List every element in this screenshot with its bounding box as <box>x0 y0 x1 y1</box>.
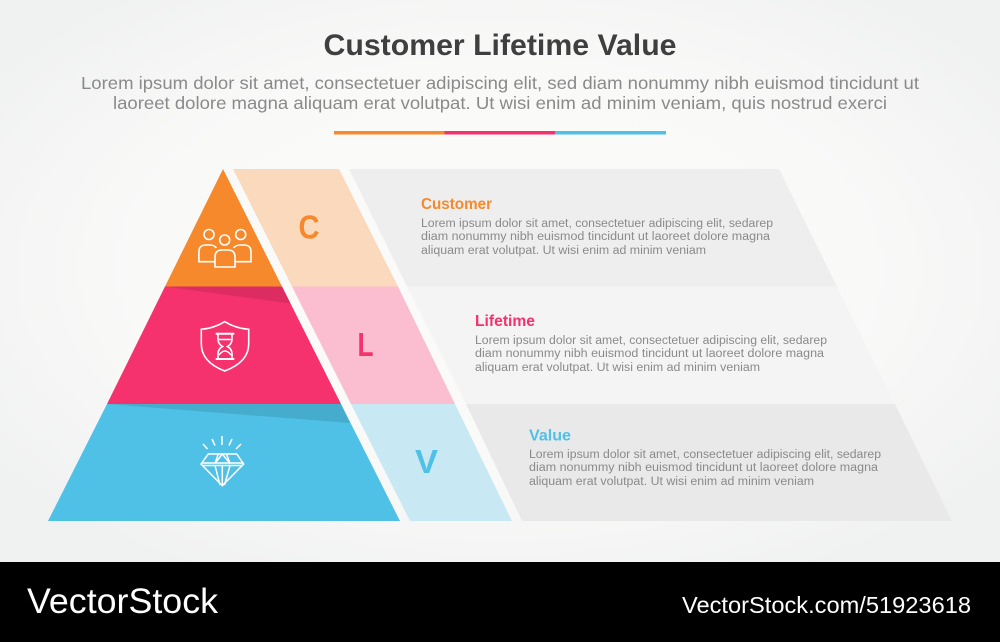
text block: value: aliquam erat volutpat. Ut wisi enim ad minim veniam <box>529 476 814 488</box>
panel: V letter band: V <box>415 443 438 480</box>
icon: group of people <box>199 230 251 267</box>
pyramid tier: customer <box>165 169 282 286</box>
title: Customer Lifetime Value <box>324 29 676 62</box>
text block: value: diam nonummy nibh euismod tincidunt ut laoreet dolore magna <box>529 462 879 474</box>
text block: customer: Lorem ipsum dolor sit amet, consectetuer adipiscing elit, sedarep <box>421 218 773 230</box>
text block: customer: diam nonummy nibh euismod tincidunt ut laoreet dolore magna <box>421 231 771 243</box>
text block: lifetime: Lorem ipsum dolor sit amet, consectetuer adipiscing elit, sedarep <box>475 335 827 347</box>
panel: lifetime text background <box>407 286 895 404</box>
panel: value text background <box>466 404 952 521</box>
icon: shield with hourglass <box>201 322 249 371</box>
subtitle: Lorem ipsum dolor sit amet, consectetuer adipiscing elit, sed diam nonummy nibh euismod tincidunt ut <box>81 73 919 93</box>
footer bar: VectorStock <box>27 582 219 621</box>
text block: value: Lorem ipsum dolor sit amet, consectetuer adipiscing elit, sedarep <box>529 449 881 461</box>
tier shadow <box>107 404 350 423</box>
subtitle: laoreet dolore magna aliquam erat volutpat. Ut wisi enim ad minim veniam, quis nostrud exerci <box>113 93 887 113</box>
tricolor divider <box>334 131 666 134</box>
panel: L letter band <box>292 286 455 404</box>
text block: customer: Customer <box>421 196 492 213</box>
panel: L letter band: L <box>358 326 374 363</box>
pyramid tier: value <box>48 404 400 521</box>
tier shadow <box>165 286 290 304</box>
text block: lifetime: diam nonummy nibh euismod tincidunt ut laoreet dolore magna <box>475 348 825 360</box>
footer bar: VectorStock.com/51923618 <box>682 592 971 618</box>
text block: customer <box>421 196 773 257</box>
icon: diamond <box>201 436 244 486</box>
subtitle <box>81 73 919 113</box>
panel: V letter band <box>351 404 512 521</box>
panel: C letter band: C <box>298 208 320 246</box>
footer bar <box>0 562 1000 642</box>
panel: customer text background <box>349 169 837 286</box>
pyramid tier: lifetime <box>107 286 341 404</box>
text block: lifetime: Lifetime <box>475 313 535 330</box>
text block: lifetime <box>475 313 827 374</box>
text block: lifetime: aliquam erat volutpat. Ut wisi enim ad minim veniam <box>475 362 760 374</box>
panel: C letter band <box>233 169 398 286</box>
text block: value <box>529 428 881 488</box>
text block: customer: aliquam erat volutpat. Ut wisi enim ad minim veniam <box>421 245 706 257</box>
text block: value: Value <box>529 428 571 444</box>
